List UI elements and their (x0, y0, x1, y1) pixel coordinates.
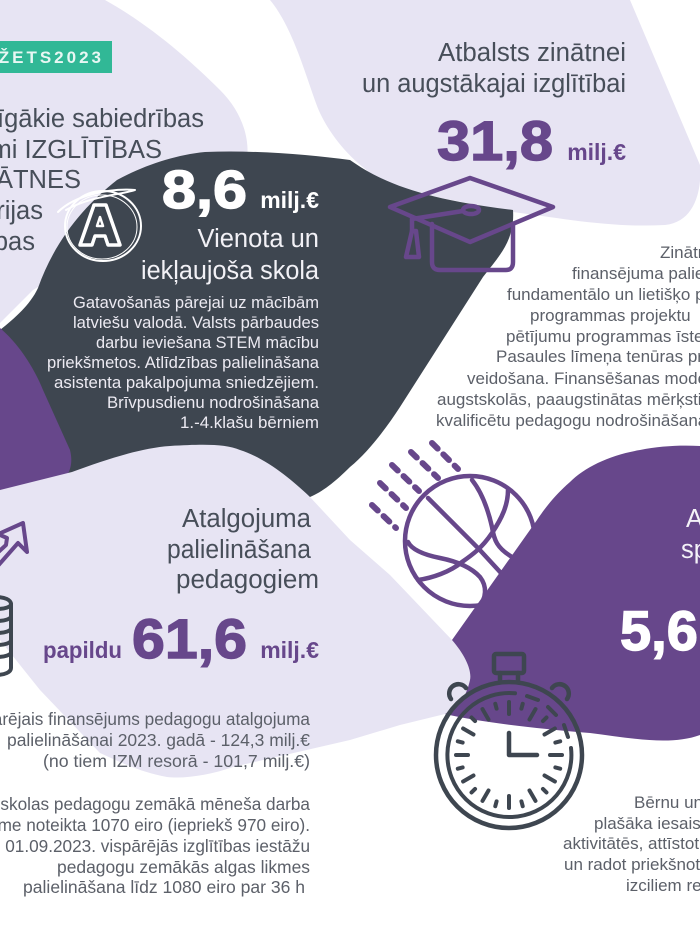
panel: right purple blob (445, 446, 700, 741)
stat: 31,8 milj.€: 31,8 (437, 109, 553, 172)
stat: 8,6 milj.€: milj.€ (260, 187, 319, 213)
icon: basketball (372, 443, 535, 608)
heading: teacher pay: Atalgojuma (182, 505, 312, 533)
heading: intro (0, 105, 204, 256)
stat: papildu 61,6 milj.€: milj.€ (260, 637, 319, 663)
text block: teacher pay: palielināšanai 2023. gadā - 124,3 milj.€ (7, 730, 310, 750)
heading: inclusive school (141, 225, 320, 285)
text block: inclusive school: Brīvpusdienu nodrošināšana (107, 394, 320, 412)
heading: teacher pay (167, 505, 319, 594)
stat: papildu 61,6 milj.€: papildu (43, 637, 122, 663)
text block: inclusive school: priekšmetos. Atlīdzības palielināšana (47, 354, 320, 372)
text block: teacher pay (0, 709, 310, 897)
heading: science support: Atbalsts zinātnei (438, 39, 626, 67)
icon: coin stack (0, 597, 11, 675)
heading: teacher pay: palielināšana (167, 536, 312, 564)
stat: 31,8 milj.€ (437, 109, 626, 172)
stat: papildu 61,6 milj.€ (43, 607, 319, 670)
text block: inclusive school: 1.-4.klašu bērniem (180, 414, 319, 432)
text block: teacher pay: palielināšana līdz 1080 eiro par 36 h (23, 877, 305, 897)
stat: papildu 61,6 milj.€: 61,6 (132, 607, 247, 670)
heading: inclusive school: iekļaujoša skola (141, 257, 320, 285)
stat: 8,6 milj.€: 8,6 (162, 160, 247, 220)
text block: inclusive school: Gatavošanās pārejai uz mācībām (73, 294, 319, 312)
badge (0, 41, 112, 73)
stat: 31,8 milj.€: milj.€ (567, 139, 626, 165)
icon: stopwatch (436, 654, 582, 828)
heading: inclusive school: Vienota un (198, 225, 319, 253)
text block: teacher pay: pedagogu zemākās algas likmes (57, 857, 310, 877)
text block: inclusive school (47, 294, 320, 432)
icon: graduation cap (390, 178, 553, 270)
background panel: top-left lavender (0, 0, 248, 323)
icon: grade A (58, 190, 141, 261)
text block: inclusive school: darbu ieviešana STEM mācību (96, 334, 319, 352)
panel: dark blob (0, 152, 513, 497)
text block: sport (563, 793, 700, 895)
heading: teacher pay: pedagogiem (176, 566, 319, 594)
text block: teacher pay: (no tiem IZM resorā - 101,7 milj.€) (43, 751, 310, 771)
heading: sport (681, 505, 700, 564)
text block: inclusive school: latviešu valodā. Valsts pārbaudes (73, 314, 319, 332)
heading: science support (362, 39, 626, 98)
panel: bottom-left lavender (0, 445, 470, 778)
text block: science support: programmas projektu (530, 306, 691, 325)
text block: science support (436, 243, 700, 430)
text block: inclusive school: asistenta pakalpojuma sniedzējiem. (54, 374, 319, 392)
background panel: top-right lavender (270, 0, 700, 226)
stat: 8,6 milj.€ (162, 160, 319, 220)
heading: science support: un augstākajai izglītībai (362, 70, 626, 98)
panel: left purple blob (0, 328, 71, 490)
icon: arrow up (0, 523, 27, 568)
